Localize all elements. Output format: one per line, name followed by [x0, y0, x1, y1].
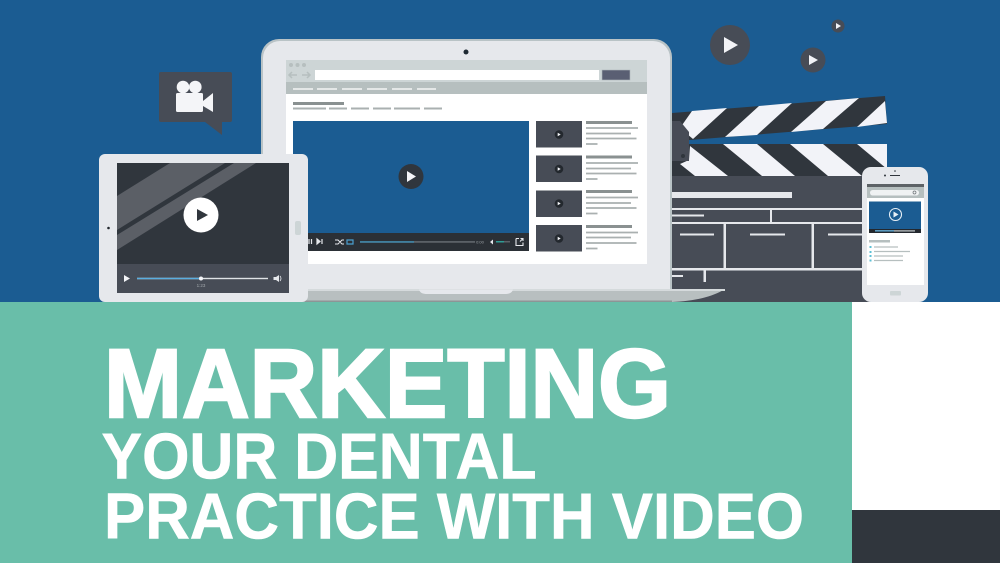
- phone home button: [890, 291, 901, 296]
- laptop camera: [464, 50, 468, 54]
- tablet play button: [184, 198, 218, 232]
- list item 3: [536, 190, 638, 217]
- main video player: 0:00: [476, 240, 485, 244]
- icon: video camera speech bubble: [159, 72, 232, 135]
- subtitle line 2: PRACTICE WITH VIDEO: [104, 480, 804, 553]
- title: marketing: MARKETING: [104, 329, 671, 438]
- list item 4: [536, 225, 638, 252]
- panel: title background: [0, 302, 852, 563]
- phone text list: [869, 240, 910, 262]
- subtitle line 1: YOUR DENTAL: [102, 420, 536, 493]
- main video player: [293, 121, 529, 251]
- icon: small play bubble: [832, 20, 844, 32]
- clapper body: [672, 176, 870, 302]
- clapper lower stripes: [672, 144, 887, 176]
- clapperboard: [672, 96, 887, 302]
- phone video: [869, 202, 921, 233]
- tablet: [99, 154, 308, 302]
- browser window: [286, 60, 647, 264]
- tablet player controls: 1:23: [197, 283, 206, 288]
- panel: white corner: [852, 302, 1000, 510]
- icon: large play bubble: [710, 25, 750, 65]
- phone screen: [867, 184, 924, 285]
- blue background: [0, 0, 1000, 303]
- list item 2: [536, 156, 638, 182]
- tablet screen: [117, 163, 289, 293]
- list item 1: [536, 121, 638, 148]
- panel: dark corner: [852, 510, 1000, 563]
- clapper hinge: [672, 121, 689, 161]
- clapper top stick: [672, 96, 887, 141]
- tablet player controls: [124, 275, 281, 288]
- laptop lid: [261, 39, 672, 289]
- laptop base: [300, 289, 725, 302]
- icon: medium play bubble: [800, 48, 826, 72]
- laptop: [261, 39, 725, 302]
- sidebar video list: [536, 121, 638, 252]
- smartphone: [862, 167, 928, 302]
